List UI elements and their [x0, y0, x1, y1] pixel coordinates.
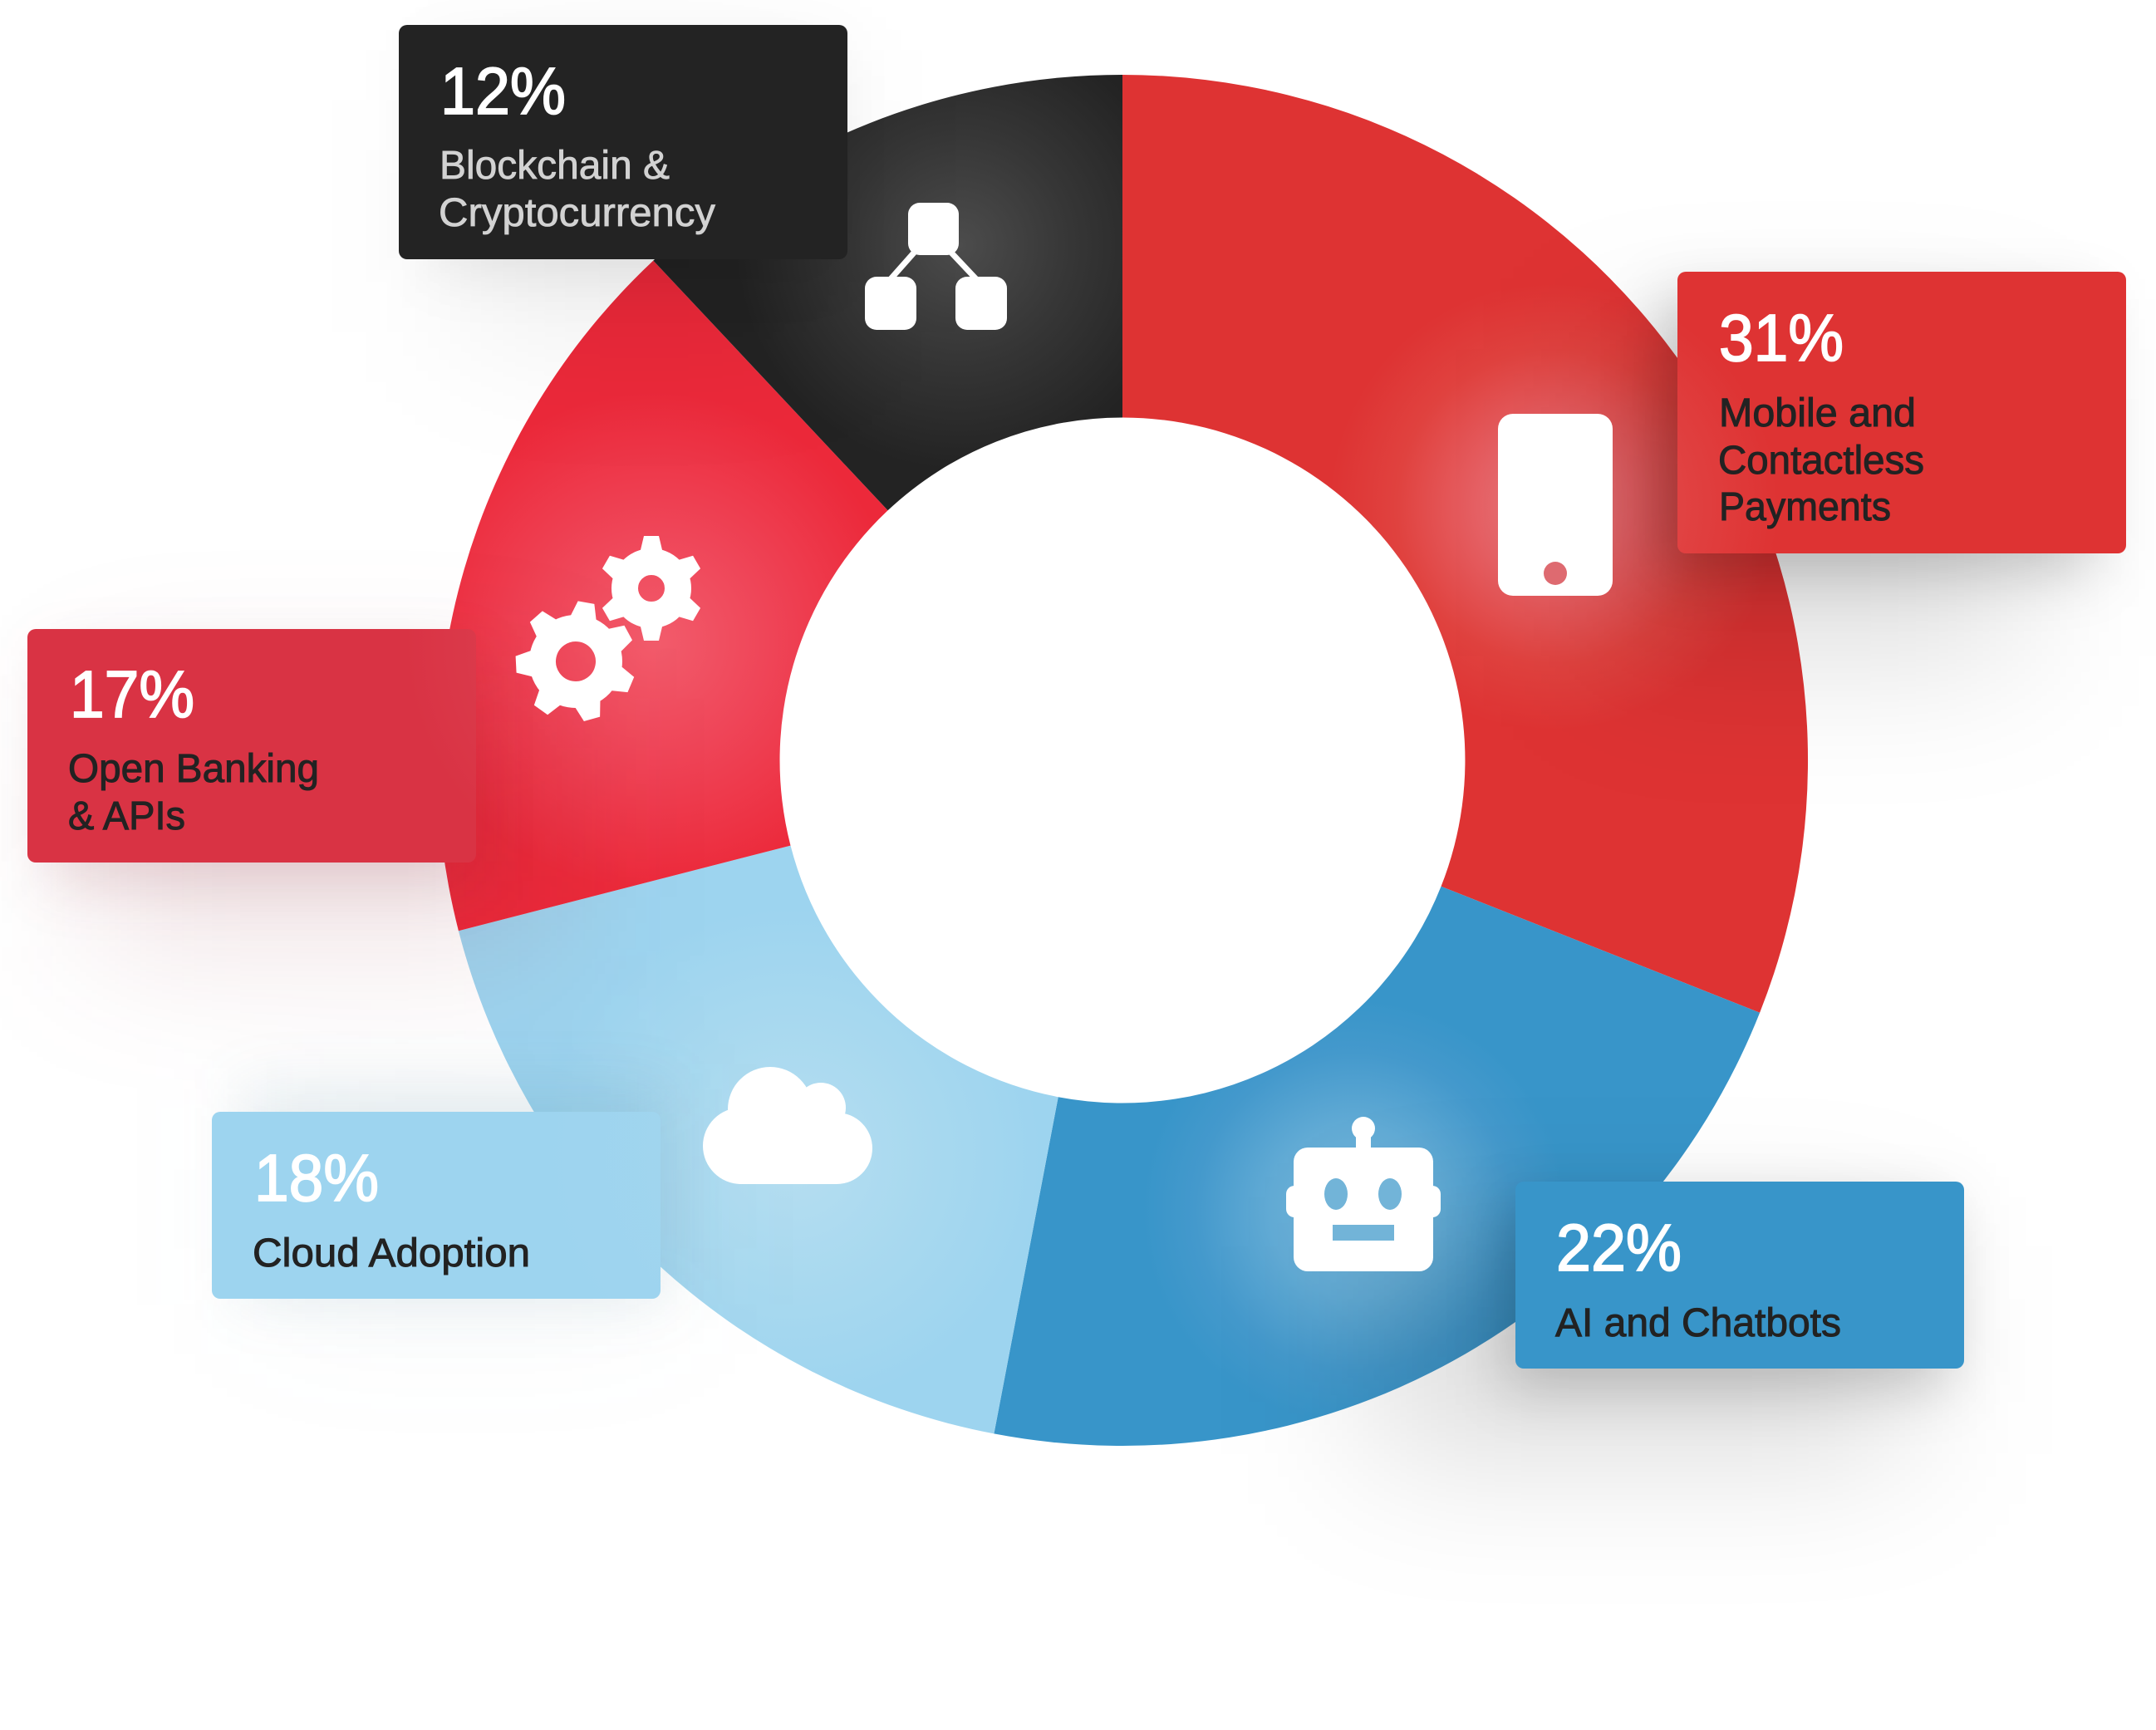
icon: cloud — [703, 1067, 872, 1184]
value: 12%: 12% — [440, 54, 566, 128]
large gear — [505, 592, 646, 731]
segment: cloud adoption 18% — [459, 846, 1058, 1433]
value: 31%: 31% — [1719, 301, 1844, 375]
segment: open banking and APIs 17% — [437, 261, 888, 931]
value: 17%: 17% — [70, 657, 194, 731]
label: Mobile and Contactless Payments: Payments — [1719, 485, 1891, 529]
label: Open Banking & APIs — [68, 747, 319, 838]
label: Open Banking & APIs: & APIs — [68, 794, 185, 838]
label: Cloud Adoption: Cloud Adoption — [253, 1231, 530, 1275]
icon: smartphone — [1498, 414, 1613, 596]
label: AI and Chatbots: AI and Chatbots — [1555, 1301, 1841, 1345]
icon: blockchain network — [865, 203, 1007, 330]
panel: blockchain and cryptocurrency — [399, 25, 847, 259]
segment: mobile and contactless payments 31% — [1122, 75, 1808, 1013]
label: Mobile and Contactless Payments — [1718, 391, 1924, 529]
segment: AI and chatbots 22% — [994, 887, 1760, 1446]
panel: mobile and contactless payments — [1677, 272, 2126, 553]
panel: open banking and APIs — [27, 629, 476, 863]
small gear — [600, 536, 703, 641]
panel: cloud adoption — [212, 1112, 661, 1299]
icon: gears — [505, 536, 703, 731]
label: Blockchain & Cryptocurrency: Blockchain & — [440, 144, 670, 188]
value: 22%: 22% — [1556, 1211, 1682, 1285]
label: Blockchain & Cryptocurrency — [439, 144, 715, 235]
panel: AI and chatbots — [1515, 1182, 1964, 1369]
value: 18%: 18% — [254, 1141, 379, 1215]
label: Blockchain & Cryptocurrency: Cryptocurrency — [439, 191, 715, 235]
donut chart — [437, 75, 1808, 1446]
label: Mobile and Contactless Payments: Contactless — [1718, 439, 1924, 483]
label: Mobile and Contactless Payments: Mobile and — [1719, 391, 1916, 435]
label: Open Banking & APIs: Open Banking — [68, 747, 319, 791]
icon: robot head — [1286, 1117, 1441, 1271]
segment: blockchain and cryptocurrency 12% — [653, 75, 1122, 510]
